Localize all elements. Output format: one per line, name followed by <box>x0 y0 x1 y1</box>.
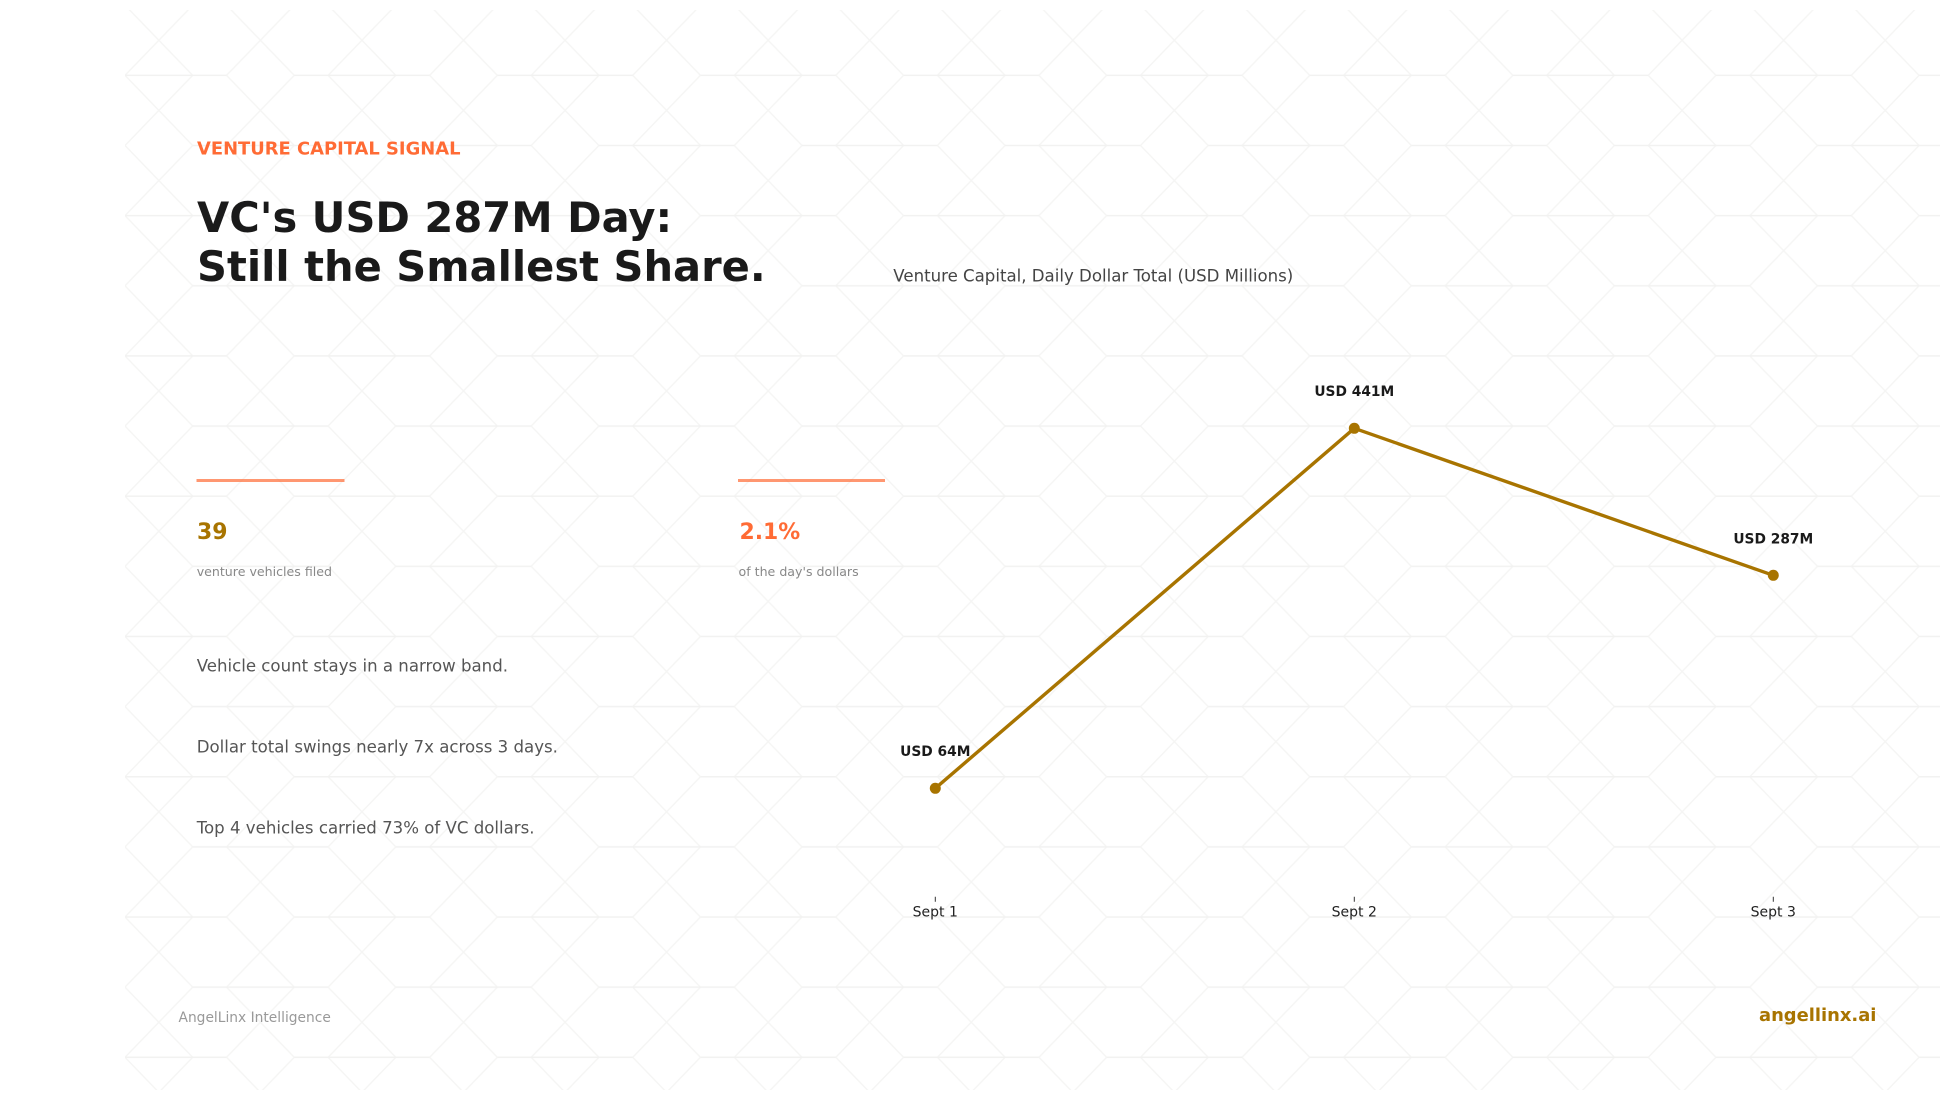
x axis ticks <box>935 897 1773 902</box>
footer source: AngelLinx Intelligence <box>178 1010 331 1026</box>
title <box>197 193 766 291</box>
value labels: USD 64M <box>900 744 970 760</box>
line chart <box>900 384 1813 920</box>
chart title: Venture Capital, Daily Dollar Total (USD Millions) <box>893 266 1293 286</box>
takeaways text block: Top 4 vehicles carried 73% of VC dollars. <box>196 818 535 838</box>
data points <box>930 423 1779 794</box>
x axis labels <box>913 904 1796 920</box>
x axis labels: Sept 2 <box>1332 904 1377 920</box>
stat: share of dollars <box>738 479 885 579</box>
eyebrow label: VENTURE CAPITAL SIGNAL <box>197 138 460 160</box>
title: Still the Smallest Share. <box>197 242 766 291</box>
stat: share of dollars: of the day's dollars <box>738 564 859 579</box>
stat: venture vehicles: 39 <box>197 520 227 545</box>
data line <box>935 428 1773 788</box>
value labels: USD 287M <box>1733 532 1813 548</box>
stat: venture vehicles: venture vehicles filed <box>197 564 332 579</box>
stat: venture vehicles <box>196 479 344 579</box>
takeaways text block: Vehicle count stays in a narrow band. <box>197 656 508 676</box>
value labels <box>900 384 1813 760</box>
stat: share of dollars: 2.1% <box>740 520 800 545</box>
title: VC's USD 287M Day: <box>197 193 672 242</box>
footer brand: angellinx.ai <box>1759 1005 1876 1026</box>
x axis labels: Sept 1 <box>913 904 958 920</box>
value labels: USD 441M <box>1314 384 1394 400</box>
takeaways text block <box>196 656 558 838</box>
takeaways text block: Dollar total swings nearly 7x across 3 days. <box>197 738 558 756</box>
x axis labels: Sept 3 <box>1751 904 1796 920</box>
